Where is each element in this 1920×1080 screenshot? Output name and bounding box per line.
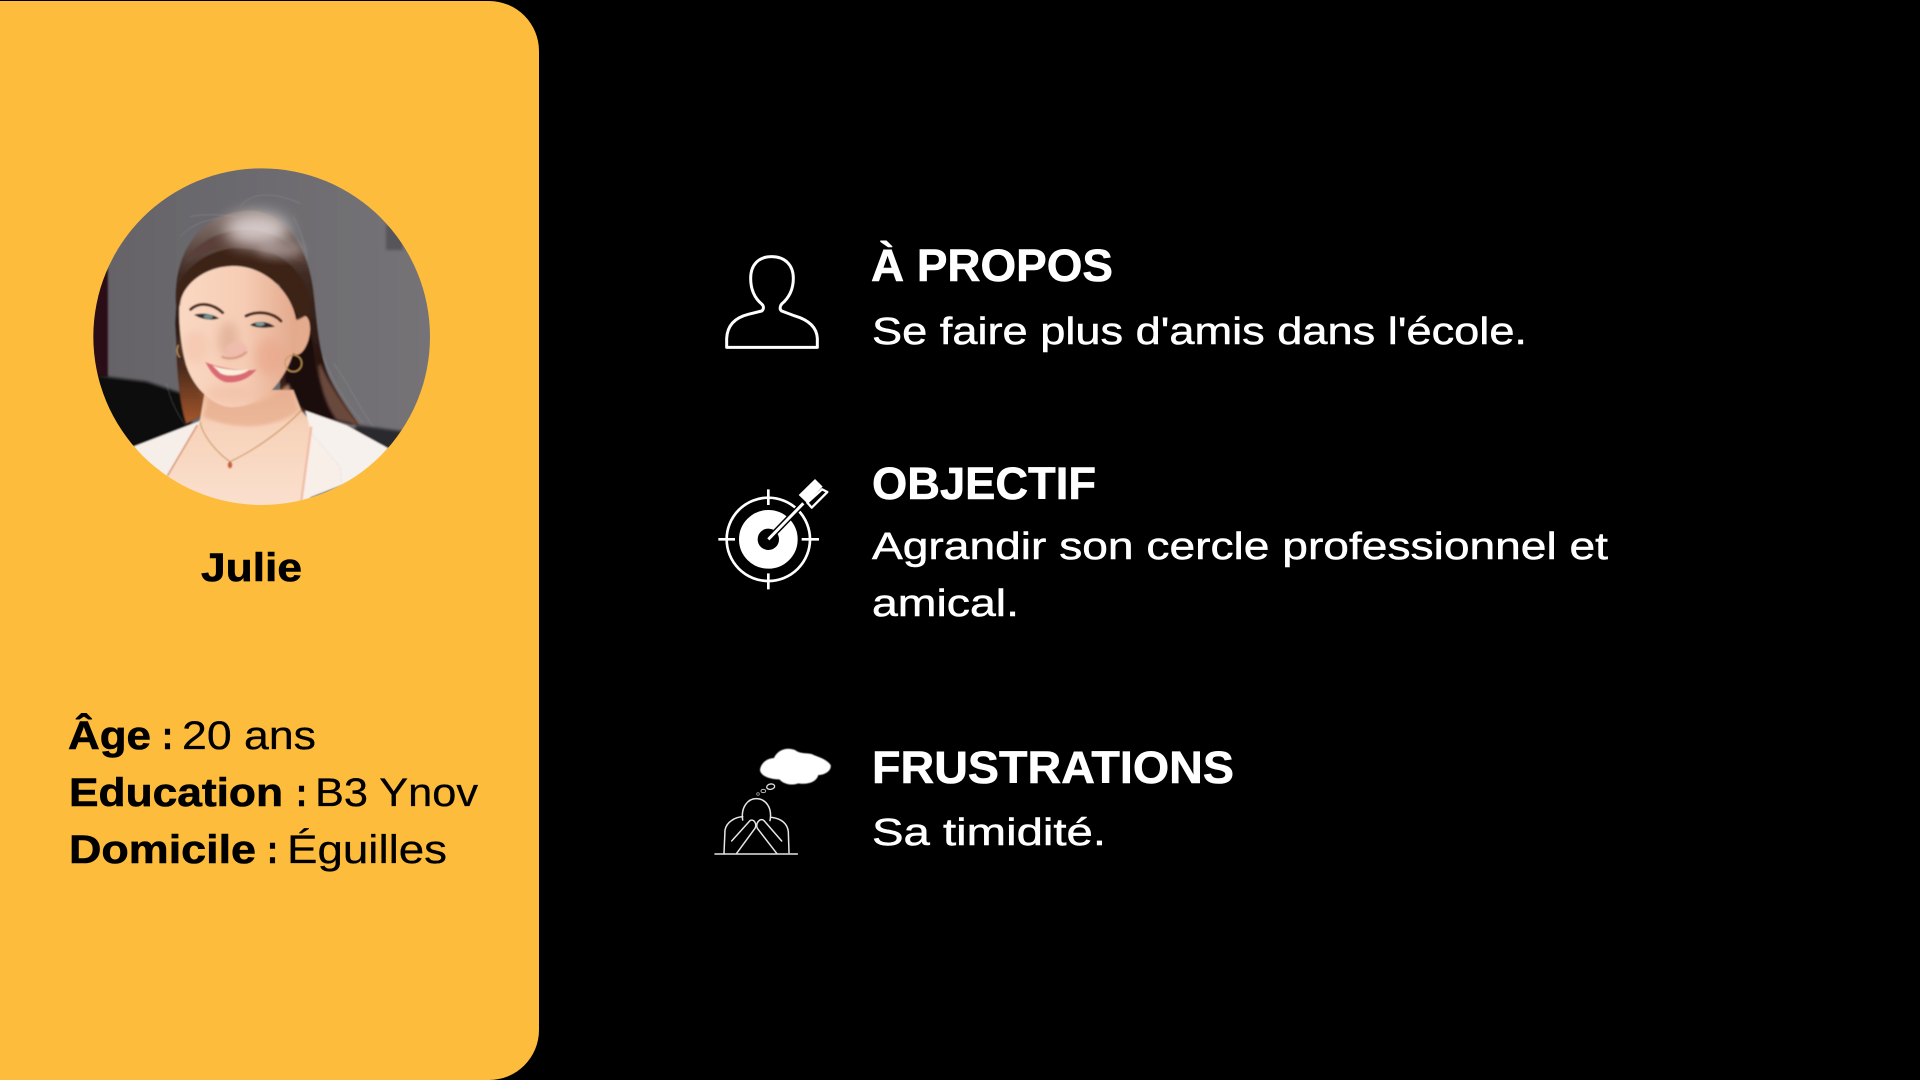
details: domicile: Éguilles: [287, 827, 447, 872]
text: objectif body: Agrandir son cercle professionnel et: [872, 526, 1609, 568]
icon: worried person with thought cloud: [715, 749, 831, 854]
details: domicile: Domicile: [69, 828, 256, 872]
text: objectif body: [872, 526, 1609, 625]
details: education: B3 Ynov: [315, 771, 478, 815]
section: à propos: [871, 240, 1527, 353]
heading: à propos: À PROPOS: [871, 240, 1113, 291]
details: age: :: [162, 714, 173, 758]
text: objectif body: amical.: [872, 583, 1019, 625]
profile photo: [90, 167, 433, 510]
details: education: [69, 771, 478, 815]
icon: person outline: [727, 257, 817, 347]
details: education: :: [296, 771, 307, 815]
section: objectif: [872, 458, 1609, 625]
panel: profile card: [0, 1, 539, 1080]
details: age: 20 ans: [182, 714, 316, 758]
heading: objectif: OBJECTIF: [872, 458, 1096, 509]
details: domicile: :: [267, 828, 278, 872]
details: age: Âge: [68, 712, 151, 758]
text: frustrations body: Sa timidité.: [872, 812, 1106, 854]
icon: target with arrow: [718, 479, 827, 589]
heading: frustrations: FRUSTRATIONS: [872, 742, 1234, 793]
section: frustrations: [872, 742, 1234, 854]
text: à propos body: Se faire plus d'amis dans l'école.: [872, 311, 1527, 353]
details: education: Education: [69, 771, 283, 815]
name: Julie: [201, 546, 302, 590]
details: domicile: [69, 827, 447, 872]
details: age: [68, 712, 316, 758]
